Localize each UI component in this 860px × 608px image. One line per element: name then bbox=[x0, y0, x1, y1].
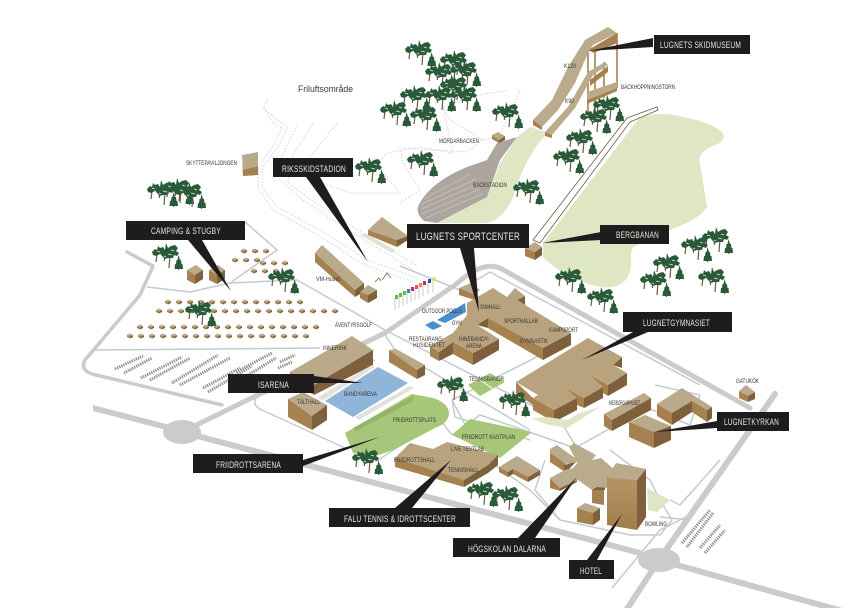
map text labels: MÖRDARBACKEN bbox=[439, 138, 479, 145]
vm-huset bbox=[315, 245, 377, 303]
talthall bbox=[288, 392, 327, 430]
map text labels: FRIIDROTT KASTPLAN bbox=[462, 435, 515, 441]
road network bbox=[84, 252, 860, 608]
map text labels: Friluftsområde bbox=[298, 84, 353, 94]
lugnets sportcenter building bbox=[430, 288, 571, 365]
callout: bergbanan: BERGBANAN bbox=[616, 230, 659, 241]
map text labels: SKYTTEPAVILJONGEN bbox=[186, 161, 237, 167]
callout: falu tennis and idrottscenter: FALU TENNIS & IDROTTSCENTER bbox=[344, 514, 456, 525]
map text labels: RESTAURANG bbox=[409, 337, 442, 343]
hotel green bbox=[647, 488, 670, 512]
tree clusters bbox=[147, 40, 733, 512]
map text labels: FRIIDROTTSPLATS bbox=[393, 418, 436, 424]
north building bbox=[360, 217, 408, 253]
small building by bandy bbox=[389, 349, 425, 379]
callout: riksskidstadion bbox=[273, 158, 368, 262]
callout: lugnetkyrkan: LUGNETKYRKAN bbox=[724, 417, 779, 428]
bergbanan station bbox=[525, 242, 542, 260]
callout: hogskolan dalarna bbox=[453, 477, 577, 557]
parking rows bbox=[115, 353, 725, 553]
funicular track bbox=[533, 107, 658, 243]
map text labels: TÄLTHALL bbox=[297, 399, 321, 406]
map text labels: FRIIDROTTSHALL bbox=[394, 458, 436, 464]
callout: lugnetkyrkan bbox=[655, 412, 789, 432]
friidrottshall and tennishall bbox=[395, 442, 498, 487]
callout: hogskolan dalarna: HÖGSKOLAN DALARNA bbox=[468, 544, 546, 555]
stadium stands bbox=[418, 137, 517, 223]
callout: camping and stugby bbox=[126, 221, 245, 291]
callout: lugnetgymnasiet: LUGNETGYMNASIET bbox=[643, 318, 710, 329]
backstadion hut bbox=[492, 132, 505, 143]
callout: bergbanan bbox=[542, 225, 669, 244]
ski trails bbox=[258, 90, 520, 282]
callout: lugnets skidmuseum: LUGNETS SKIDMUSEUM bbox=[660, 40, 741, 51]
medborgarhuset bbox=[604, 393, 651, 431]
isarena building bbox=[290, 336, 373, 395]
callout: hotel bbox=[569, 514, 622, 579]
friidrottsplats bbox=[345, 394, 449, 457]
gatukok bbox=[739, 385, 755, 402]
map text labels: ARENA bbox=[466, 344, 482, 350]
callout: lugnets sportcenter: LUGNETS SPORTCENTER bbox=[416, 231, 520, 243]
camping cabins bbox=[127, 248, 343, 339]
map text labels: TENNISHALL bbox=[448, 468, 480, 474]
camping buildings bbox=[187, 265, 225, 284]
thin paths bbox=[93, 222, 720, 588]
callout: isarena: ISARENA bbox=[258, 380, 289, 391]
small L building bbox=[499, 456, 540, 482]
map text labels: BOWLING bbox=[645, 522, 667, 528]
map text labels: SPORTHALLAR bbox=[504, 319, 539, 325]
map text labels: TENNISBANOR bbox=[469, 377, 505, 383]
green ski slopes bbox=[437, 114, 724, 287]
L-shaped building bbox=[657, 388, 712, 425]
tennisbanor bbox=[468, 373, 505, 396]
lugnetgymnasiet building bbox=[516, 338, 627, 428]
map text labels: OUTDOOR POOLS bbox=[422, 309, 462, 315]
callout: lugnets skidmuseum bbox=[588, 35, 750, 54]
map text labels: VM-Huset bbox=[316, 277, 340, 283]
map text labels: INNERINK bbox=[323, 346, 347, 352]
map text labels: BACKSTADION bbox=[473, 183, 507, 189]
hogskolan dalarna bbox=[550, 443, 616, 525]
map text labels: ÄVENTYRSGOLF bbox=[335, 322, 372, 329]
bandyarena bbox=[318, 365, 414, 420]
map text labels: KAMPSPORT bbox=[549, 328, 578, 334]
map text labels: K90 bbox=[565, 99, 575, 105]
callout: friidrottsarena bbox=[193, 437, 380, 473]
ski jump towers bbox=[533, 27, 617, 138]
map text labels: GATUKÖK bbox=[736, 378, 759, 385]
map text labels: LIVE TESTLAB bbox=[451, 447, 484, 453]
map text labels: K120 bbox=[564, 64, 577, 70]
ski chevrons bbox=[375, 273, 391, 282]
map text labels: GYM bbox=[452, 321, 462, 327]
small hall behind sportcenter bbox=[459, 283, 480, 300]
callout: falu tennis and idrottscenter bbox=[329, 460, 470, 527]
skyttepaviljongen bbox=[242, 152, 258, 176]
callout: isarena bbox=[228, 374, 363, 393]
hotel building bbox=[607, 463, 646, 530]
outdoor pools bbox=[425, 303, 466, 330]
map text labels bbox=[186, 64, 759, 528]
map text labels: BACKHOPPNINGSTORN bbox=[621, 85, 675, 91]
callout: lugnetgymnasiet bbox=[582, 312, 732, 360]
callout: friidrottsarena: FRIIDROTTSARENA bbox=[216, 460, 281, 471]
flags bbox=[395, 277, 436, 310]
lugnetkyrkan building bbox=[629, 415, 671, 448]
callout: lugnets sportcenter bbox=[407, 224, 529, 312]
friidrott kastplan bbox=[452, 419, 532, 458]
map text labels: HUSIDENTET bbox=[413, 343, 445, 349]
callout: riksskidstadion: RIKSSKIDSTADION bbox=[282, 164, 346, 175]
callout: camping and stugby: CAMPING & STUGBY bbox=[151, 226, 221, 237]
map text labels: INNEBANDY- bbox=[459, 337, 489, 343]
map text labels: GYMNASTIK bbox=[520, 339, 548, 345]
map text labels: MEDBORGARHUSET bbox=[609, 401, 640, 407]
map text labels: BANDYARENA bbox=[344, 392, 377, 398]
map text labels: SIMHALL bbox=[480, 305, 502, 311]
callout: hotel: HOTEL bbox=[580, 566, 602, 577]
